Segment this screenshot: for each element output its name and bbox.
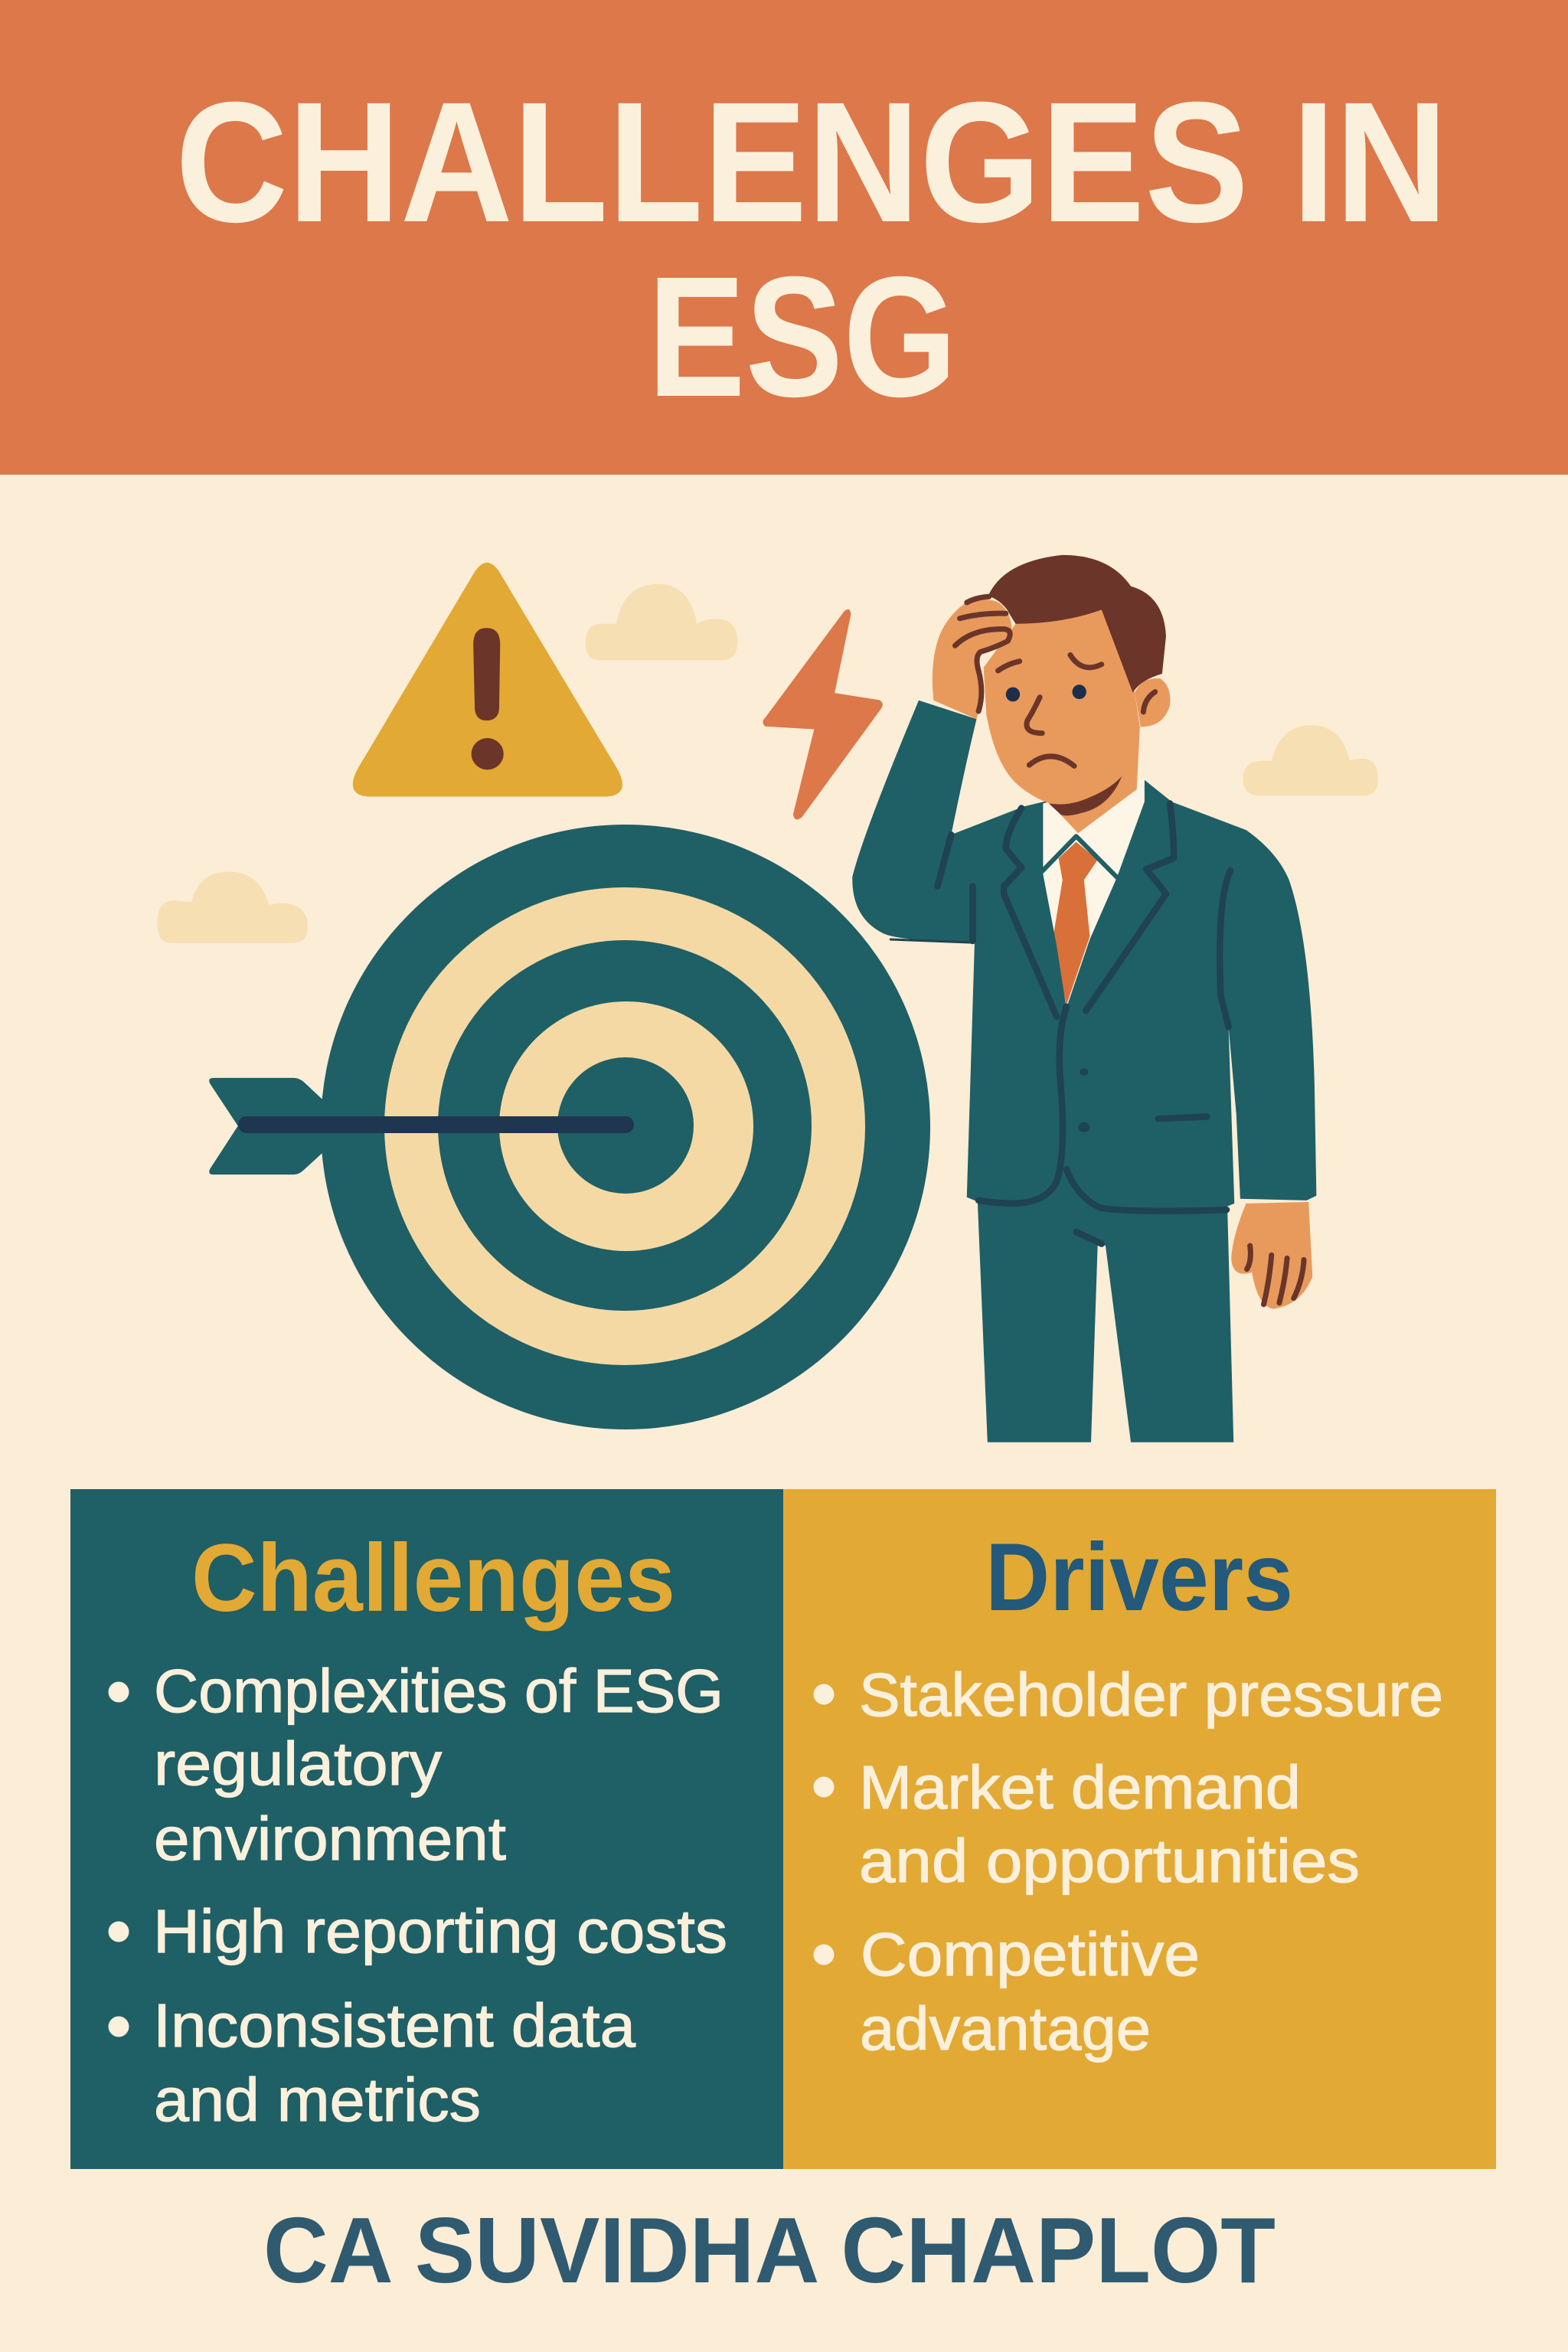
icon: warning triangle — [353, 563, 622, 797]
bullet list: challenges: environment — [154, 1805, 506, 1873]
bullet list: drivers: and opportunities — [859, 1827, 1360, 1895]
target rings — [321, 825, 930, 1429]
icon: lightning bolt — [763, 609, 883, 819]
title — [175, 67, 1448, 433]
bullet list: challenges: and metrics — [154, 2066, 481, 2134]
collar line — [1042, 836, 1117, 877]
jacket detail lines — [890, 803, 1230, 1244]
bullet list: drivers: advantage — [860, 1994, 1151, 2063]
bullet list: challenges — [109, 1657, 727, 2134]
shirt — [1043, 779, 1145, 1008]
ear — [1135, 678, 1170, 727]
heading: challenges: Challenges — [191, 1525, 675, 1632]
lapels — [1004, 780, 1174, 1017]
title: ESG — [648, 241, 957, 433]
bullet list: challenges: High reporting costs — [153, 1897, 727, 1965]
icon: cloud right — [1243, 725, 1378, 795]
bullet list: challenges: regulatory — [154, 1730, 442, 1798]
icon: cloud top — [586, 584, 737, 660]
neck and face — [984, 609, 1140, 833]
panel: challenges — [70, 1489, 783, 2169]
bullet list: challenges: Complexities of ESG — [154, 1657, 724, 1725]
tie — [1053, 842, 1098, 1005]
raised hand — [933, 596, 1011, 719]
target with arrow — [209, 825, 930, 1429]
hair — [988, 555, 1166, 693]
arrow fletching — [209, 1078, 331, 1174]
heading: drivers: Drivers — [985, 1524, 1293, 1631]
arrow shaft — [238, 1116, 634, 1133]
panel: drivers — [783, 1489, 1496, 2169]
footer author name: CA SUVIDHA CHAPLOT — [263, 2198, 1276, 2302]
header banner — [0, 0, 1568, 475]
bullet list: challenges: Inconsistent data — [153, 1991, 636, 2060]
bullet list: drivers — [813, 1661, 1443, 2063]
bullet list: drivers: Stakeholder pressure — [859, 1661, 1443, 1729]
chin shadow — [1049, 776, 1122, 815]
bullet list: drivers: Market demand — [859, 1753, 1301, 1821]
bullet list: drivers: Competitive — [861, 1920, 1200, 1988]
jacket — [852, 701, 1316, 1211]
icon: cloud left — [158, 872, 308, 943]
jacket buttons — [1078, 1069, 1089, 1132]
face features — [998, 655, 1102, 766]
figure: worried businessman — [852, 555, 1316, 1442]
title: CHALLENGES IN — [175, 67, 1448, 258]
lowered hand — [1231, 1202, 1312, 1308]
trousers — [977, 1177, 1233, 1442]
